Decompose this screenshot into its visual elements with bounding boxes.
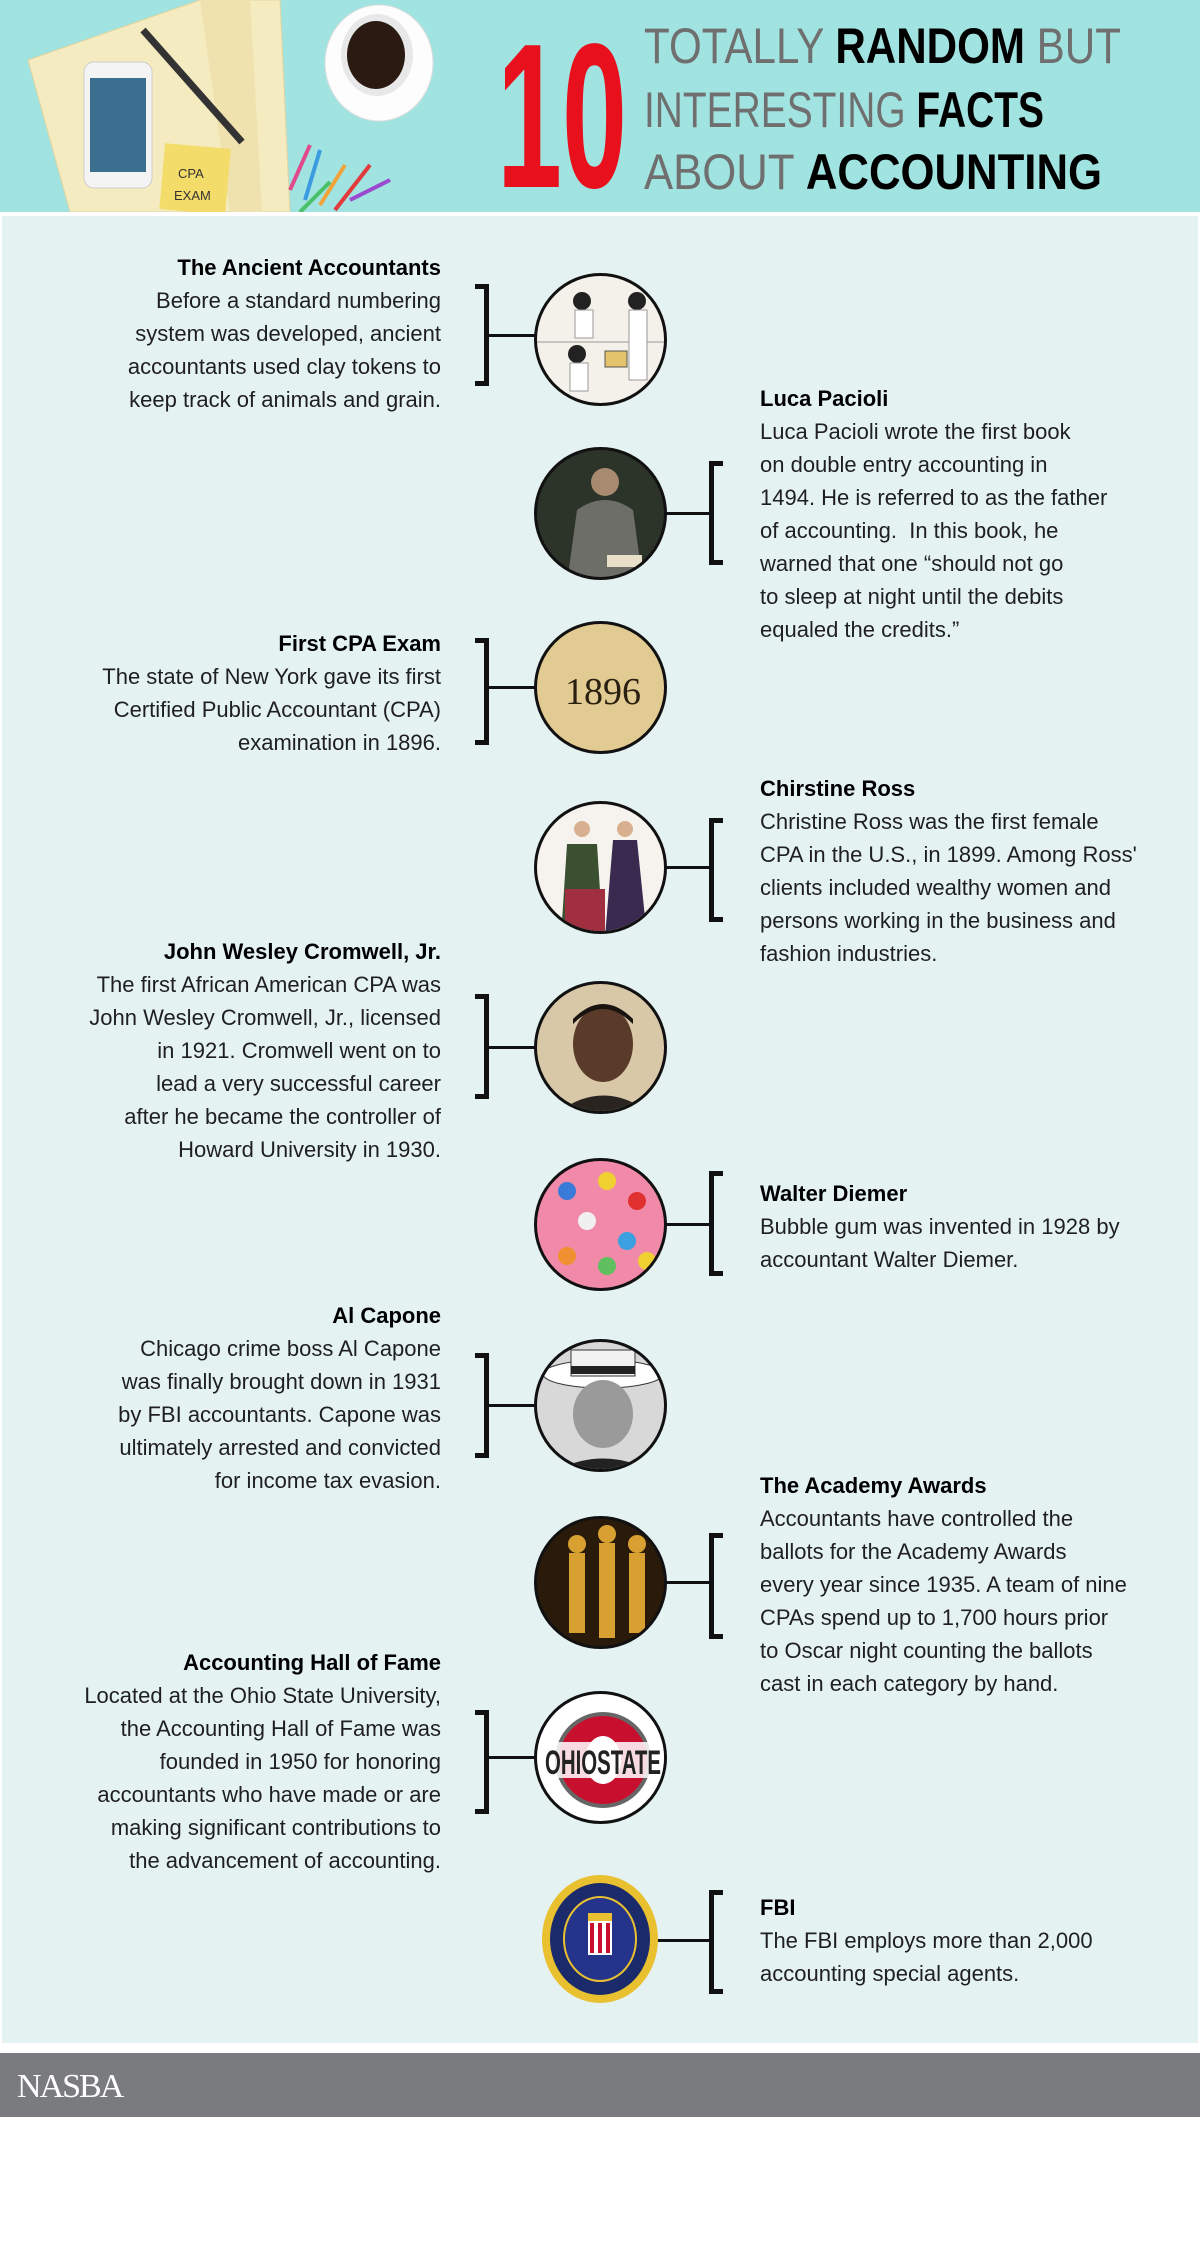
fact 4: Christine Ross text	[760, 776, 1137, 966]
fact 9: Accounting Hall of Fame text: founded in 1950 for honoring	[160, 1749, 441, 1774]
fact 7: Al Capone text: ultimately arrested and convicted	[119, 1435, 441, 1460]
fact 1: ancient accountants text: keep track of animals and grain.	[129, 387, 441, 412]
fact 8: Academy Awards text: Accountants have controlled the	[760, 1506, 1073, 1531]
fact 1: ancient accountants text: accountants used clay tokens to	[128, 354, 441, 379]
fact 9: Accounting Hall of Fame text	[84, 1650, 441, 1873]
bracket 3	[475, 638, 489, 745]
fact 6: Walter Diemer text: Walter Diemer	[760, 1181, 907, 1206]
fact 7: Al Capone text: was finally brought down in 1931	[122, 1369, 441, 1394]
bracket 10	[709, 1890, 723, 1994]
fact 9: Accounting Hall of Fame text: the advancement of accounting.	[129, 1848, 441, 1873]
fact 1: ancient accountants text: Before a standard numbering	[156, 288, 441, 313]
fact 8: Academy Awards text: ballots for the Academy Awards	[760, 1539, 1067, 1564]
icon: Capone portrait	[534, 1339, 667, 1472]
icon: sticky note	[159, 143, 231, 215]
fact 5: John Wesley Cromwell text: John Wesley Cromwell, Jr., licensed	[89, 1005, 441, 1030]
icon: Cromwell portrait	[534, 981, 667, 1114]
footer bar	[0, 2053, 1200, 2117]
icon: folder	[28, 0, 290, 212]
icon: FBI seal	[542, 1875, 658, 2003]
fact 9: Accounting Hall of Fame text: Accounting Hall of Fame	[183, 1650, 441, 1675]
fact 3: first CPA exam text: examination in 1896.	[238, 730, 441, 755]
fact 2: Luca Pacioli text: Luca Pacioli wrote the first book	[760, 419, 1071, 444]
fact 9: Accounting Hall of Fame text: the Accounting Hall of Fame was	[121, 1716, 441, 1741]
fact 8: Academy Awards text: CPAs spend up to 1,700 hours prior	[760, 1605, 1108, 1630]
icon: ancient accountants	[534, 273, 667, 406]
title text: TOTALLY RANDOM BUT	[644, 18, 1121, 74]
fact 4: Christine Ross text: Chirstine Ross	[760, 776, 915, 801]
icon: coffee cup	[325, 5, 433, 121]
fact 6: Walter Diemer text: accountant Walter Diemer.	[760, 1247, 1018, 1272]
fact 9: Accounting Hall of Fame text: accountants who have made or are	[97, 1782, 441, 1807]
title text: ABOUT ACCOUNTING	[644, 144, 1102, 200]
fact 10: FBI text: accounting special agents.	[760, 1961, 1019, 1986]
fact 5: John Wesley Cromwell text	[89, 939, 442, 1162]
icon: sticky note: CPA	[178, 166, 204, 181]
fact 3: first CPA exam text: The state of New York gave its first	[102, 664, 441, 689]
fact 1: ancient accountants text	[128, 255, 441, 412]
fact 10: FBI text: FBI	[760, 1895, 795, 1920]
icon: Pacioli portrait	[534, 447, 667, 580]
fact 2: Luca Pacioli text: equaled the credits.”	[760, 617, 959, 642]
fact 8: Academy Awards text: to Oscar night counting the ballots	[760, 1638, 1093, 1663]
bracket 4	[709, 818, 723, 922]
fact 2: Luca Pacioli text: to sleep at night until the debits	[760, 584, 1063, 609]
fact 8: Academy Awards text: cast in each category by hand.	[760, 1671, 1058, 1696]
fact 5: John Wesley Cromwell text: Howard University in 1930.	[178, 1137, 441, 1162]
fact 2: Luca Pacioli text: warned that one “should not go	[760, 551, 1063, 576]
fact 2: Luca Pacioli text: Luca Pacioli	[760, 386, 888, 411]
icon: phone	[84, 62, 152, 188]
fact 4: Christine Ross text: Christine Ross was the first female	[760, 809, 1099, 834]
logo: NASBA: NASBA	[17, 2068, 122, 2105]
fact 10: FBI text: The FBI employs more than 2,000	[760, 1928, 1093, 1953]
fact 4: Christine Ross text: fashion industries.	[760, 941, 937, 966]
icon: bubble gum	[534, 1158, 667, 1291]
fact 7: Al Capone text: by FBI accountants. Capone was	[118, 1402, 441, 1427]
title text: INTERESTING FACTS	[644, 82, 1044, 138]
fact 6: Walter Diemer text	[760, 1181, 1120, 1272]
header banner	[0, 0, 1200, 212]
bracket 6	[709, 1171, 723, 1276]
icon: paper clips	[290, 145, 390, 212]
fact 2: Luca Pacioli text: on double entry accounting in	[760, 452, 1047, 477]
fact 5: John Wesley Cromwell text: after he became the controller of	[124, 1104, 441, 1129]
fact 3: first CPA exam text: First CPA Exam	[278, 631, 441, 656]
bracket 9	[475, 1710, 489, 1814]
title text	[644, 18, 1121, 200]
fact 5: John Wesley Cromwell text: in 1921. Cromwell went on to	[157, 1038, 441, 1063]
fact 8: Academy Awards text: The Academy Awards	[760, 1473, 987, 1498]
fact 6: Walter Diemer text: Bubble gum was invented in 1928 by	[760, 1214, 1120, 1239]
icon: pencil	[143, 30, 242, 142]
bracket 1	[475, 284, 489, 386]
fact 7: Al Capone text: Al Capone	[332, 1303, 441, 1328]
bracket 8	[709, 1533, 723, 1639]
icon: Ohio State logo	[534, 1691, 667, 1824]
bracket 2	[709, 461, 723, 565]
icon: Victorian women	[534, 801, 667, 934]
icon: oscar statues	[534, 1516, 667, 1649]
fact 8: Academy Awards text: every year since 1935. A team of nine	[760, 1572, 1127, 1597]
icon: 1896: 1896	[565, 671, 641, 713]
icon: 1896	[534, 621, 667, 754]
fact 5: John Wesley Cromwell text: The first African American CPA was	[97, 972, 441, 997]
fact 9: Accounting Hall of Fame text: making significant contributions to	[111, 1815, 441, 1840]
fact 3: first CPA exam text: Certified Public Accountant (CPA)	[114, 697, 441, 722]
fact 4: Christine Ross text: CPA in the U.S., in 1899. Among Ross'	[760, 842, 1137, 867]
fact 5: John Wesley Cromwell text: lead a very successful career	[156, 1071, 441, 1096]
fact 1: ancient accountants text: system was developed, ancient	[135, 321, 441, 346]
icon: sticky note: EXAM	[174, 188, 211, 203]
fact 4: Christine Ross text: persons working in the business and	[760, 908, 1116, 933]
fact 8: Academy Awards text	[760, 1473, 1127, 1696]
fact 7: Al Capone text: Chicago crime boss Al Capone	[140, 1336, 441, 1361]
fact 2: Luca Pacioli text: 1494. He is referred to as the father	[760, 485, 1107, 510]
fact 7: Al Capone text	[118, 1303, 441, 1493]
fact 1: ancient accountants text: The Ancient Accountants	[177, 255, 441, 280]
fact 7: Al Capone text: for income tax evasion.	[215, 1468, 441, 1493]
fact 10: FBI text	[760, 1895, 1093, 1986]
fact 2: Luca Pacioli text: of accounting. In this book, he	[760, 518, 1058, 543]
fact 2: Luca Pacioli text	[760, 386, 1107, 642]
bracket 5	[475, 994, 489, 1099]
fact 9: Accounting Hall of Fame text: Located at the Ohio State University,	[84, 1683, 441, 1708]
fact 5: John Wesley Cromwell text: John Wesley Cromwell, Jr.	[164, 939, 441, 964]
fact 4: Christine Ross text: clients included wealthy women and	[760, 875, 1111, 900]
fact 3: first CPA exam text	[102, 631, 441, 755]
bracket 7	[475, 1353, 489, 1458]
